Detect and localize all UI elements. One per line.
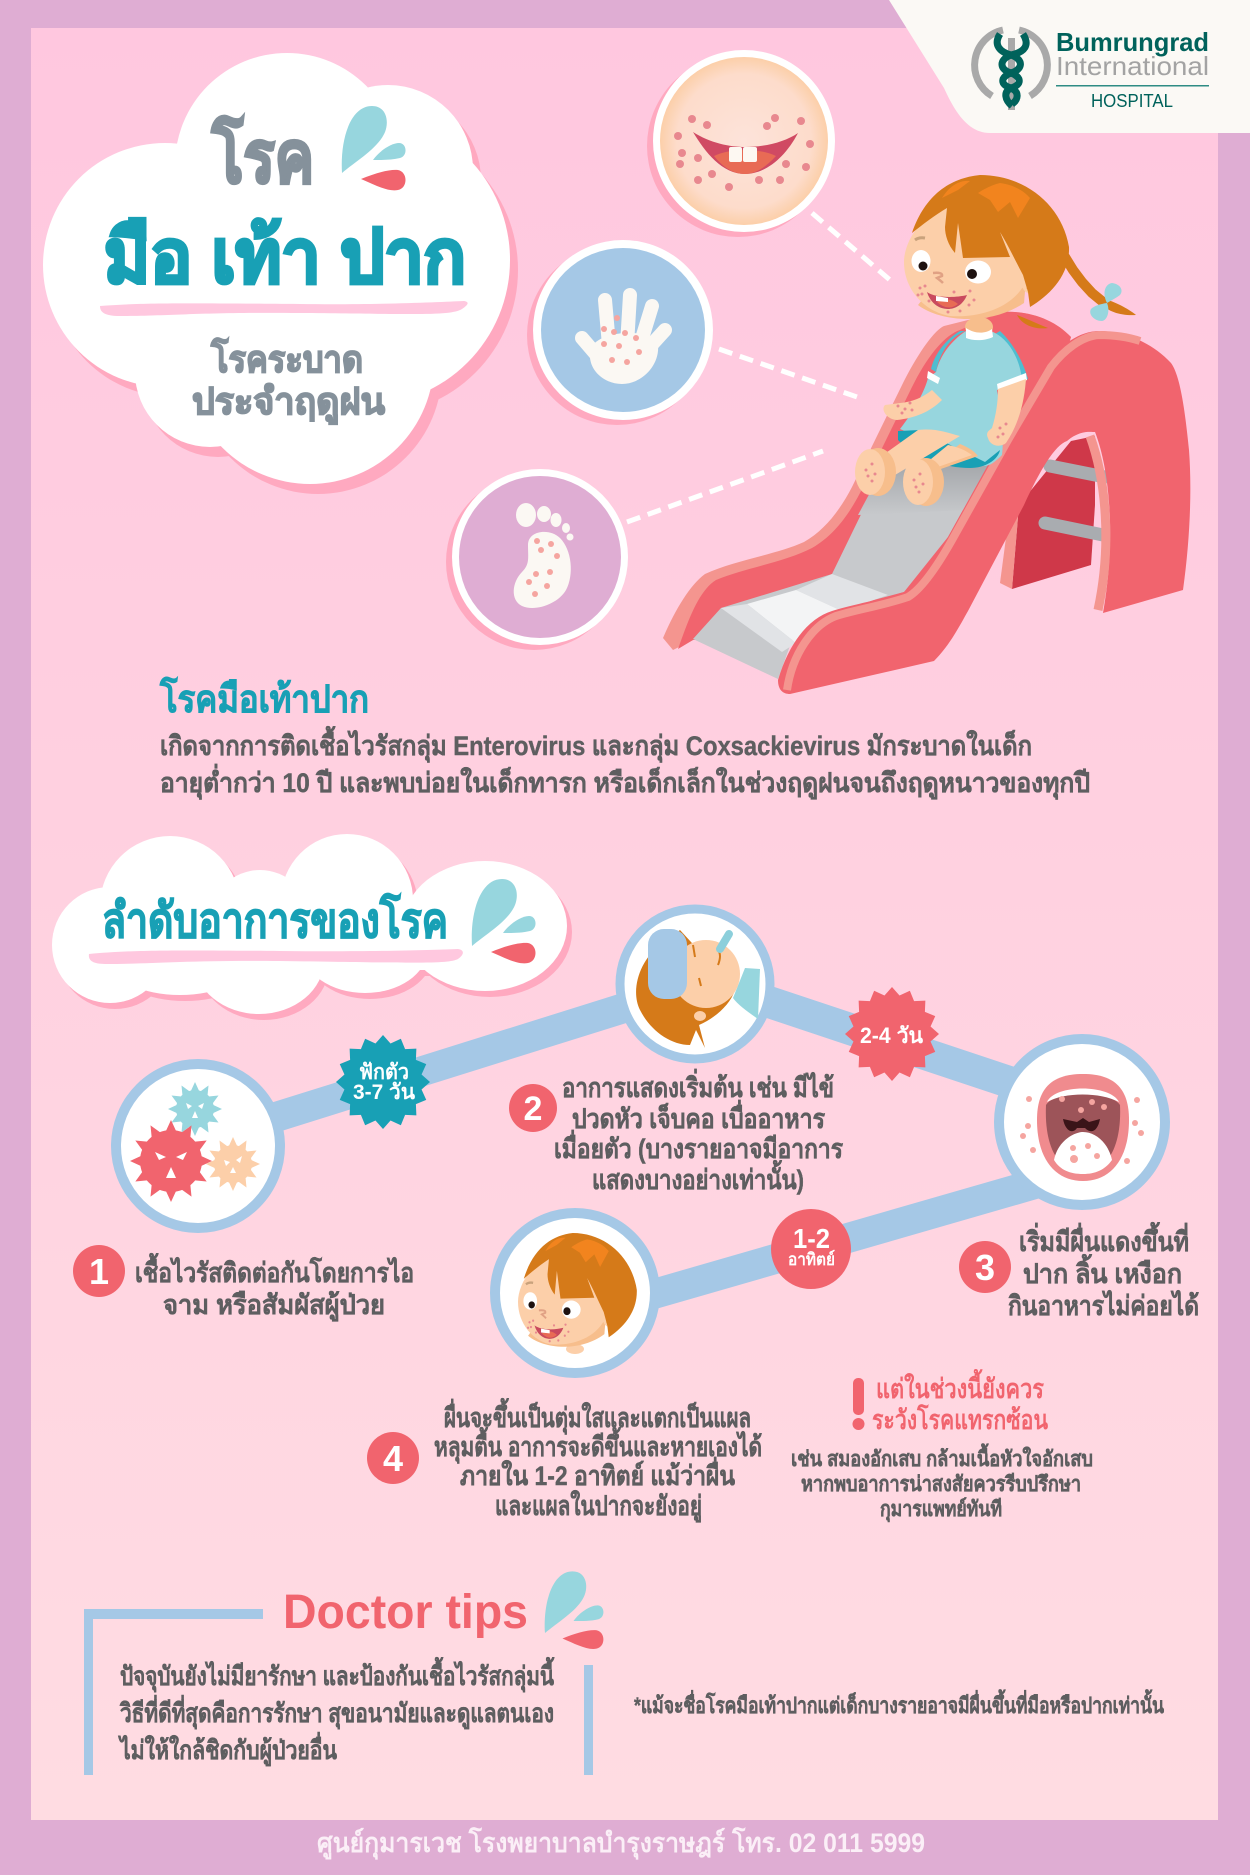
circle: hand rash (527, 240, 713, 425)
warning body: หากพบอาการน่าสงสัยควรรีบปรึกษา (801, 1472, 1081, 1496)
title cloud (43, 53, 518, 494)
badge: 2-4 days (845, 987, 939, 1081)
dashed connector: hand (719, 349, 860, 398)
step 4 text: หลุมตื้น อาการจะดีขึ้นและหายเองได้ (434, 1426, 762, 1464)
warning body: เช่น สมองอักเสบ กล้ามเนื้อหัวใจอักเสบ (791, 1443, 1093, 1471)
slide under arch (1012, 436, 1095, 589)
warning heading: แต่ในช่วงนี้ยังควร (876, 1368, 1044, 1404)
title: มือ เท้า ปาก: มือ เท้า ปาก (104, 215, 466, 298)
section heading text: ลำดับอาการของโรค (102, 892, 448, 948)
step 4 number: 4 (383, 1438, 403, 1479)
step 4 circle: child face (495, 1213, 655, 1373)
badge: incubation: 3-7 วัน (353, 1081, 416, 1104)
icon: smiling mouth (693, 132, 798, 174)
step 2 number: 2 (524, 1090, 542, 1128)
dashed connector: mouth (812, 213, 890, 280)
step 1 text (135, 1252, 414, 1322)
step 2 text: แสดงบางอย่างเท่านั้น) (592, 1159, 804, 1195)
slide front wall (778, 331, 1190, 694)
warning: ระวังโรคแทรกซ้อน (872, 1403, 1048, 1435)
slide far rail (663, 312, 1071, 650)
intro heading: โรคมือเท้าปาก (159, 676, 369, 721)
step 3 number: 3 (975, 1247, 995, 1288)
step 3 text: ปาก ลิ้น เหงือก (1023, 1253, 1182, 1289)
tips body (118, 1656, 555, 1767)
title underline (100, 301, 468, 316)
slide chute (693, 420, 1004, 679)
timeline connector 3-4 (640, 1184, 1035, 1298)
intro paragraph: อายุต่ำกว่า 10 ปี และพบบ่อยในเด็กทารก หรือเด็กเล็กในช่วงฤดูฝนจนถึงฤดูหนาวของทุกปี (160, 763, 1090, 800)
icon: hand (582, 295, 665, 366)
child neck (965, 317, 993, 337)
circle: mouth rash (647, 50, 835, 237)
step 1 number (73, 1245, 125, 1297)
icon: splash drops (472, 879, 536, 963)
step 2 text: อาการแสดงเริ่มต้น เช่น มีไข้ (562, 1068, 834, 1103)
step 3 number (959, 1241, 1011, 1293)
step 4 text: ผื่นจะขึ้นเป็นตุ่มใสและแตกเป็นแผล (444, 1397, 751, 1435)
logo text: Bumrungrad (1056, 27, 1209, 57)
icon: hospital caduceus (975, 30, 1047, 110)
timeline connector 1-2 (260, 1003, 640, 1122)
icon: teal germ (168, 1082, 222, 1136)
badge: incubation: ฟักตัว (359, 1061, 409, 1084)
child arms (883, 379, 1026, 446)
logo text (1056, 27, 1209, 111)
child dress (900, 328, 1028, 466)
child (855, 175, 1136, 506)
step 2 text: ปวดหัว เจ็บคอ เบื่ออาหาร (572, 1099, 825, 1134)
tips heading: Doctor tips (283, 1586, 528, 1639)
subtitle: โรคระบาด (210, 337, 363, 380)
warning body (791, 1443, 1093, 1523)
step 4 number (367, 1432, 419, 1484)
child shorts (898, 430, 1000, 468)
step 3 text: เริ่มมีผื่นแดงขึ้นที่ (1019, 1221, 1189, 1257)
warning body: กุมารแพทย์ทันที (880, 1497, 1002, 1523)
badge: 1-2 weeks: อาทิตย์ (788, 1249, 835, 1269)
step 2 text: เมื่อยตัว (บางรายอาจมีอาการ (554, 1129, 843, 1164)
icon: foot (514, 503, 574, 608)
child legs and feet (855, 429, 978, 506)
title cloud: ประจำฤดูฝน (192, 381, 385, 425)
step 3 circle: open mouth (999, 1039, 1165, 1205)
tips body: วิธีที่ดีที่สุดคือการรักษา สุขอนามัยและดูแลตนเอง (120, 1694, 554, 1730)
step 4 text: และแผลในปากจะยังอยู่ (495, 1490, 702, 1523)
icon: splash drops (342, 106, 406, 190)
child head (904, 175, 1069, 319)
slide ladder rungs (1045, 466, 1105, 535)
tips frame (84, 1609, 593, 1775)
heading underline (89, 949, 463, 964)
section heading cloud (52, 834, 572, 1020)
logo text: International (1056, 51, 1209, 81)
intro paragraph: เกิดจากการติดเชื้อไวรัสกลุ่ม Enterovirus และกลุ่ม Coxsackievirus มักระบาดในเด็ก (160, 725, 1032, 763)
badge: 1-2 weeks (771, 1209, 851, 1289)
step 2 number (509, 1084, 557, 1132)
icon: red germ (130, 1120, 212, 1202)
circle: foot rash (446, 469, 628, 650)
badge: 1-2 weeks: 1-2 (793, 1223, 830, 1254)
icon: exclamation mark (852, 1378, 864, 1430)
step 1 number: 1 (89, 1251, 109, 1292)
doctor tips (84, 1571, 603, 1775)
step 3 text (1008, 1221, 1199, 1321)
tips body: ไม่ให้ใกล้ชิดกับผู้ป่วยอื่น (118, 1731, 337, 1767)
timeline connector 2-3 (760, 999, 1015, 1084)
child hair tail under chin (1017, 315, 1048, 328)
step 2 text (554, 1068, 843, 1195)
badge: incubation (336, 1035, 430, 1129)
logo text: HOSPITAL (1091, 91, 1173, 111)
slide (663, 312, 1190, 694)
child braid and bow (1065, 257, 1136, 321)
step 1 circle: germs (116, 1064, 280, 1228)
dashed connector: foot (627, 451, 823, 522)
step 1 text: จาม หรือสัมผัสผู้ป่วย (163, 1290, 385, 1322)
icon: splash drops (545, 1571, 603, 1649)
step 3 text: กินอาหารไม่ค่อยได้ (1008, 1290, 1199, 1321)
tips body: ปัจจุบันยังไม่มียารักษา และป้องกันเชื้อไวรัสกลุ่มนี้ (120, 1656, 555, 1693)
step 1 text: เชื้อไวรัสติดต่อกันโดยการไอ (135, 1252, 414, 1288)
icon: peach germ (206, 1137, 260, 1191)
step 4 text (434, 1397, 762, 1523)
title: โรค: โรค (211, 114, 314, 198)
logo panel (889, 0, 1250, 133)
badge: 2-4 days: 2-4 วัน (860, 1023, 923, 1048)
warning (791, 1368, 1093, 1523)
intro paragraph (160, 725, 1090, 800)
step 2 circle: sick child (620, 909, 770, 1059)
footer contact: ศูนย์กุมารเวช โรงพยาบาลบำรุงราษฎร์ โทร. 02 011 5999 (317, 1826, 925, 1860)
step 4 text: ภายใน 1-2 อาทิตย์ แม้ว่าผื่น (460, 1456, 735, 1491)
